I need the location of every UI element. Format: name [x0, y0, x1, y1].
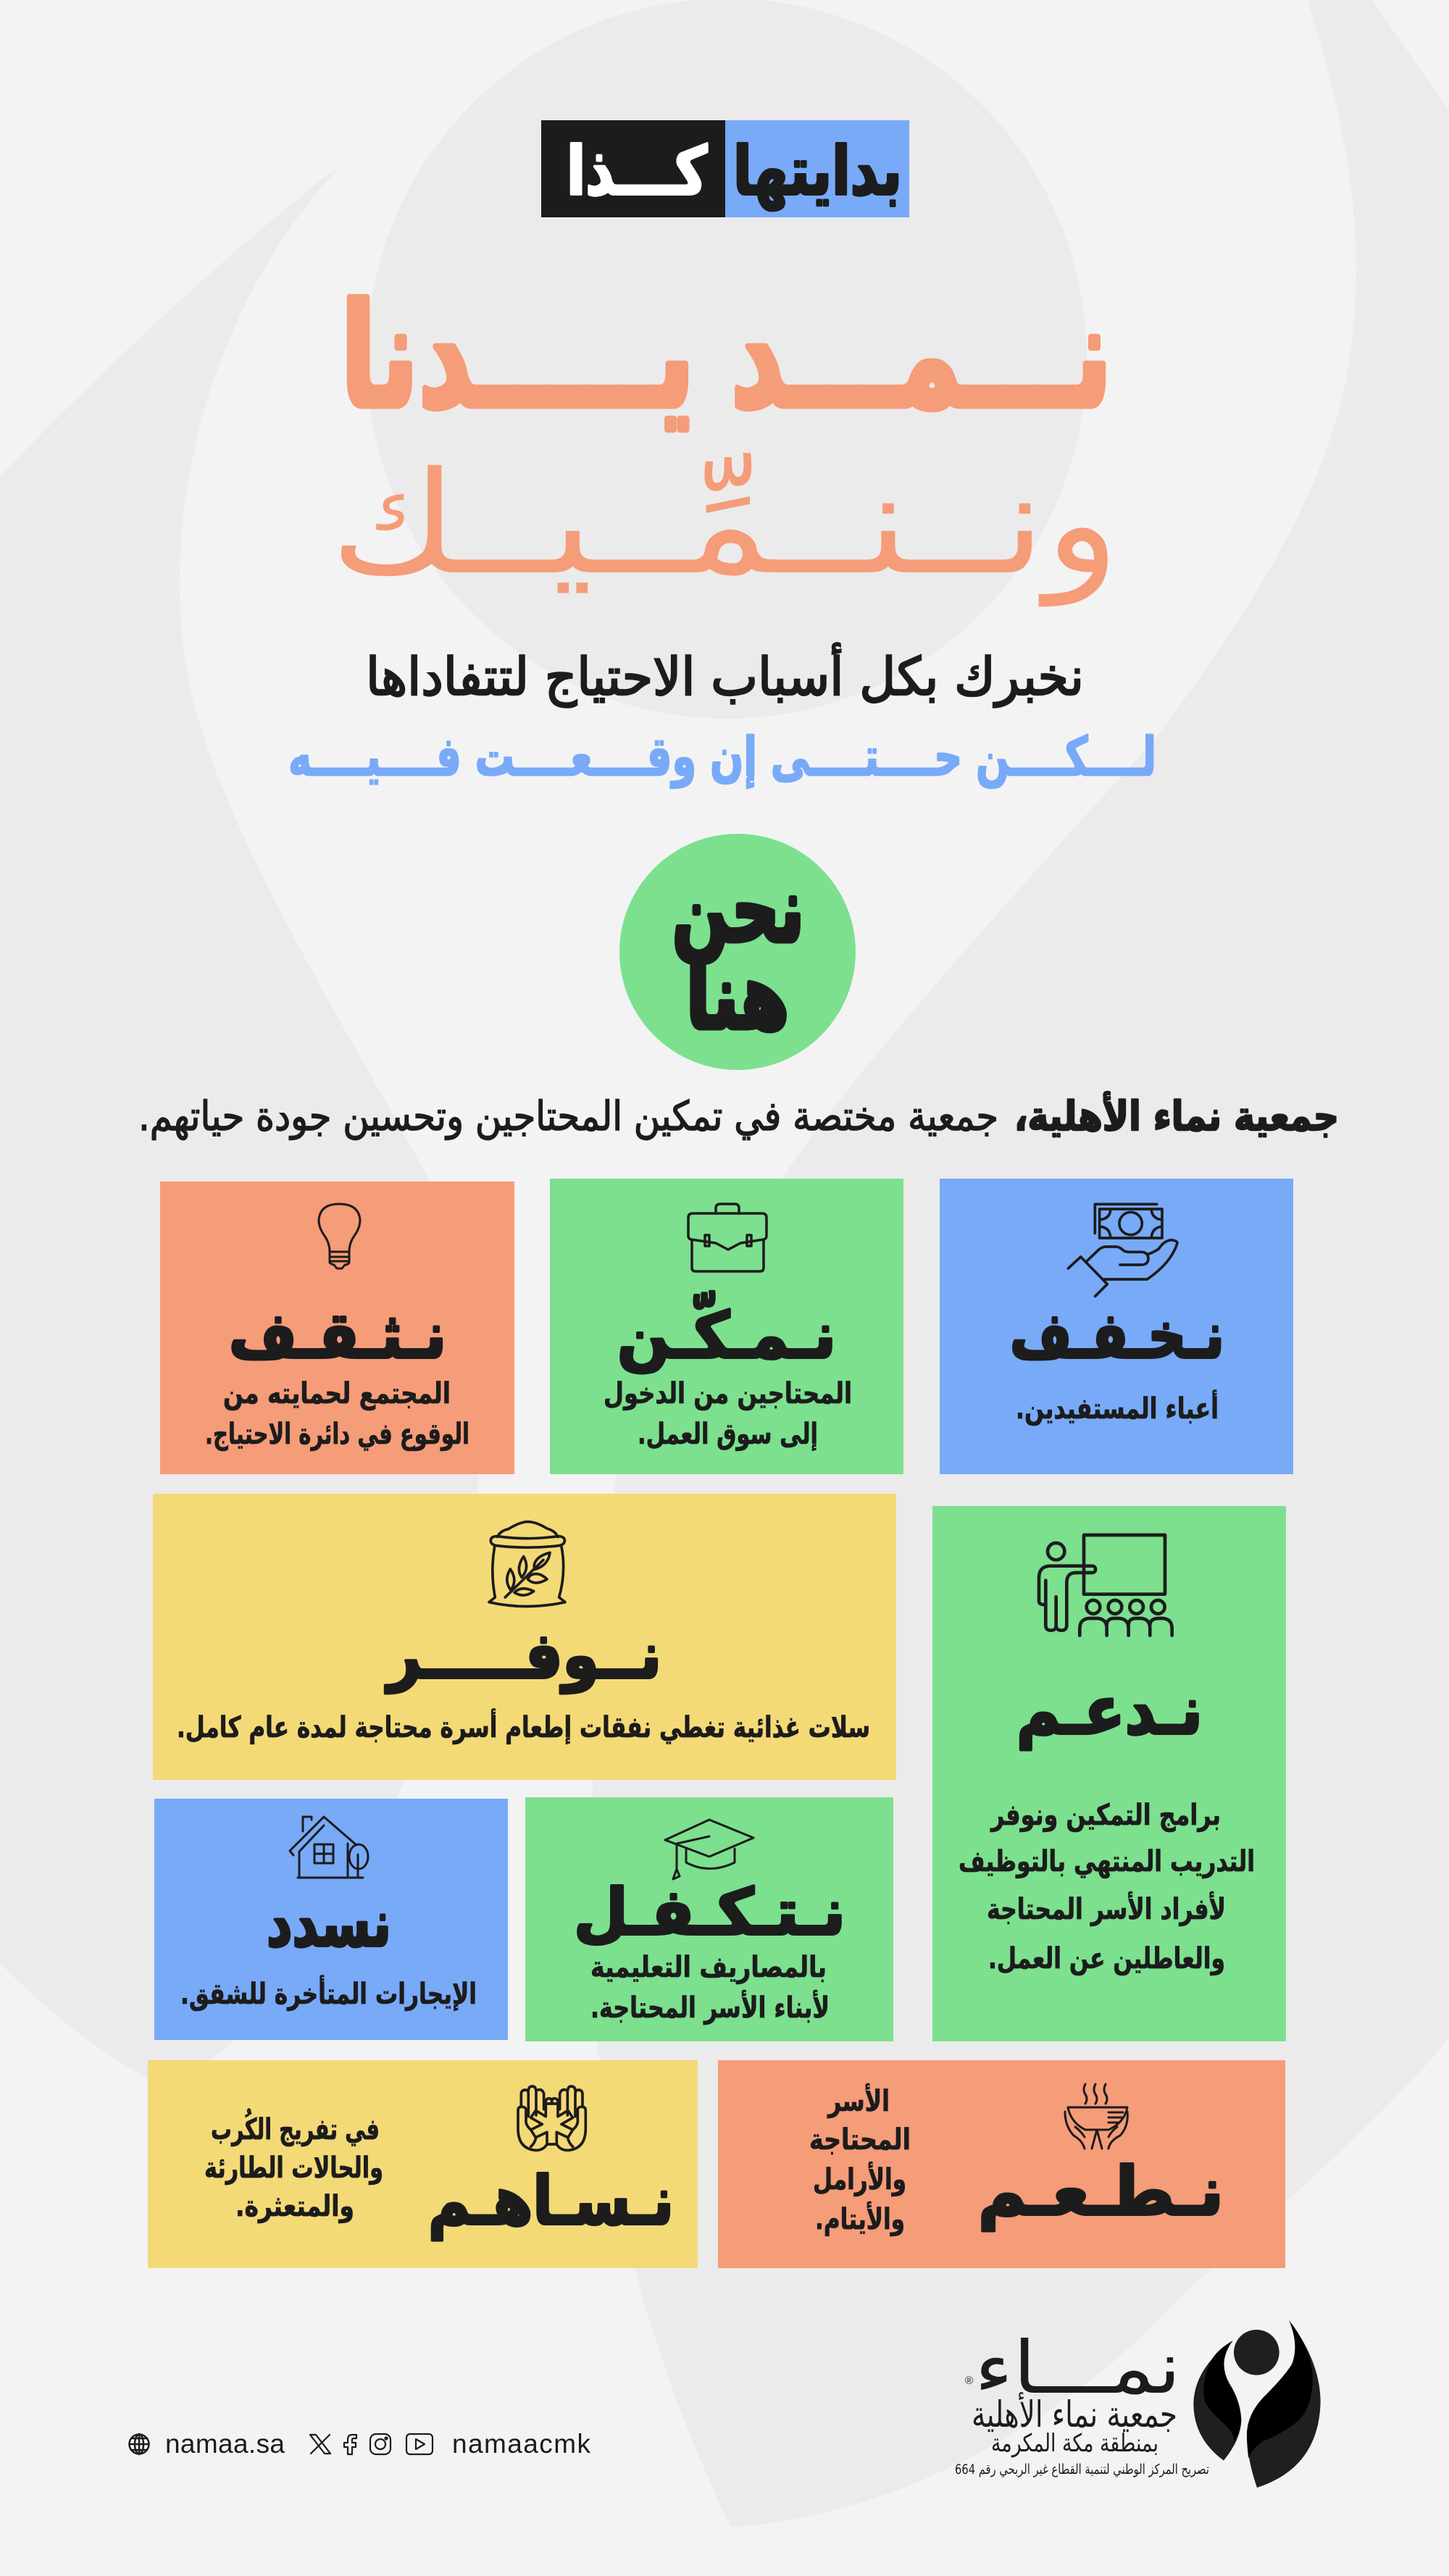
panel: natakaffal	[525, 1797, 893, 2041]
heading: نـسـاهـم	[428, 2162, 674, 2241]
title line two: ونــنــمِّــيــك	[330, 441, 1119, 607]
panel: nasuddu	[154, 1799, 508, 2040]
body text	[809, 2083, 911, 2236]
icon: teacher and students	[1039, 1535, 1172, 1636]
registered mark: ®	[965, 2375, 973, 2387]
icon: briefcase	[688, 1204, 767, 1271]
organisation description: جمعية مختصة في تمكين المحتاجين وتحسين جودة حياتهم.	[138, 1093, 998, 1140]
icon: hand with money	[1068, 1204, 1177, 1296]
license line: تصريح المركز الوطني لتنمية القطاع غير الربحي رقم 664	[955, 2462, 1209, 2477]
panel: nadam	[932, 1506, 1286, 2041]
body text: برامج التمكين ونوفر	[990, 1799, 1221, 1832]
heading: نـدعـم	[1016, 1672, 1203, 1750]
logo wordmark: نمـــاء	[974, 2325, 1181, 2410]
green circle: we are here	[619, 834, 856, 1070]
body text	[590, 1951, 830, 2025]
body text: في تفريج الكُرب	[211, 2108, 380, 2146]
body text: لأفراد الأسر المحتاجة	[987, 1891, 1226, 1926]
panel: numakkin	[550, 1179, 903, 1474]
badge: bidayatuha kadha: بدايتها	[733, 133, 902, 211]
icons: social media	[310, 2434, 433, 2454]
subtitle blue: لــــكــــن حــــتــــى إن وقــــعــــت فــــيــــه	[288, 726, 1156, 789]
body text: الأسر	[827, 2083, 890, 2118]
panel: nuwaffir	[153, 1494, 896, 1780]
body text: إلى سوق العمل.	[638, 1418, 818, 1451]
panel: nuthaqqif	[160, 1182, 514, 1474]
body text: أعباء المستفيدين.	[1016, 1389, 1219, 1426]
body text: والحالات الطارئة	[204, 2151, 383, 2185]
badge: bidayatuha kadha	[541, 120, 909, 217]
icon: graduation cap	[665, 1820, 753, 1879]
heading: نـمـكّـن	[617, 1291, 836, 1373]
body text: والأيتام.	[815, 2201, 905, 2236]
subtitle dark: نخبرك بكل أسباب الاحتياج لتتفاداها	[366, 643, 1084, 708]
body text	[604, 1377, 852, 1451]
body text: لأبناء الأسر المحتاجة.	[590, 1989, 830, 2025]
body text: والمتعثرة.	[235, 2190, 354, 2223]
title line one: نـــمـــد يـــــدنا	[341, 274, 1112, 440]
logo name: جمعية نماء الأهلية	[972, 2392, 1177, 2435]
body text: والأرامل	[813, 2161, 906, 2196]
heading: نـتـكـفـل	[574, 1875, 845, 1949]
body text: الإيجارات المتأخرة للشقق.	[180, 1975, 477, 2011]
body text: المحتاجة	[809, 2123, 911, 2157]
panel: nukhaffif	[940, 1179, 1293, 1474]
body text	[959, 1799, 1255, 1975]
body text	[204, 2108, 383, 2223]
icon: globe	[129, 2434, 149, 2454]
body text: المحتاجين من الدخول	[604, 1377, 852, 1410]
body text: والعاطلين عن العمل.	[988, 1942, 1225, 1975]
logo region: بمنطقة مكة المكرمة	[991, 2429, 1158, 2458]
body text: التدريب المنتهي بالتوظيف	[959, 1845, 1255, 1878]
badge: bidayatuha kadha: كـــذا	[567, 133, 707, 210]
footer: website and social handles	[129, 2429, 591, 2459]
heading: نـثـقـف	[229, 1298, 446, 1373]
icon: light bulb	[319, 1204, 360, 1268]
website: namaa.sa	[165, 2429, 285, 2459]
body text: المجتمع لحمايته من	[223, 1377, 451, 1410]
social handle: namaacmk	[452, 2429, 591, 2459]
logo mark	[1193, 2320, 1321, 2488]
heading: نسدد	[267, 1886, 391, 1961]
icon: hands with medical star	[518, 2086, 585, 2150]
body text: الوقوع في دائرة الاحتياج.	[205, 1418, 469, 1451]
body text: بالمصاريف التعليمية	[590, 1951, 827, 1984]
icon: house	[290, 1817, 368, 1878]
panel: nutim	[718, 2060, 1285, 2268]
green circle: we are here: هنا	[686, 945, 789, 1050]
heading: نـطـعـم	[978, 2153, 1224, 2231]
icon: grain sack	[489, 1522, 565, 1606]
body text: سلات غذائية تغطي نفقات إطعام أسرة محتاجة لمدة عام كامل.	[177, 1708, 870, 1744]
body text	[205, 1377, 469, 1451]
icon: hands holding bowl	[1065, 2084, 1127, 2149]
heading: نـخـفـف	[1010, 1298, 1224, 1373]
heading: نــوفـــــر	[385, 1618, 661, 1694]
organisation description: جمعية نماء الأهلية،	[1014, 1091, 1339, 1140]
green circle: we are here: نحن	[672, 858, 804, 963]
logo: namaa association	[955, 2320, 1321, 2488]
panel: nusahim	[148, 2060, 698, 2268]
